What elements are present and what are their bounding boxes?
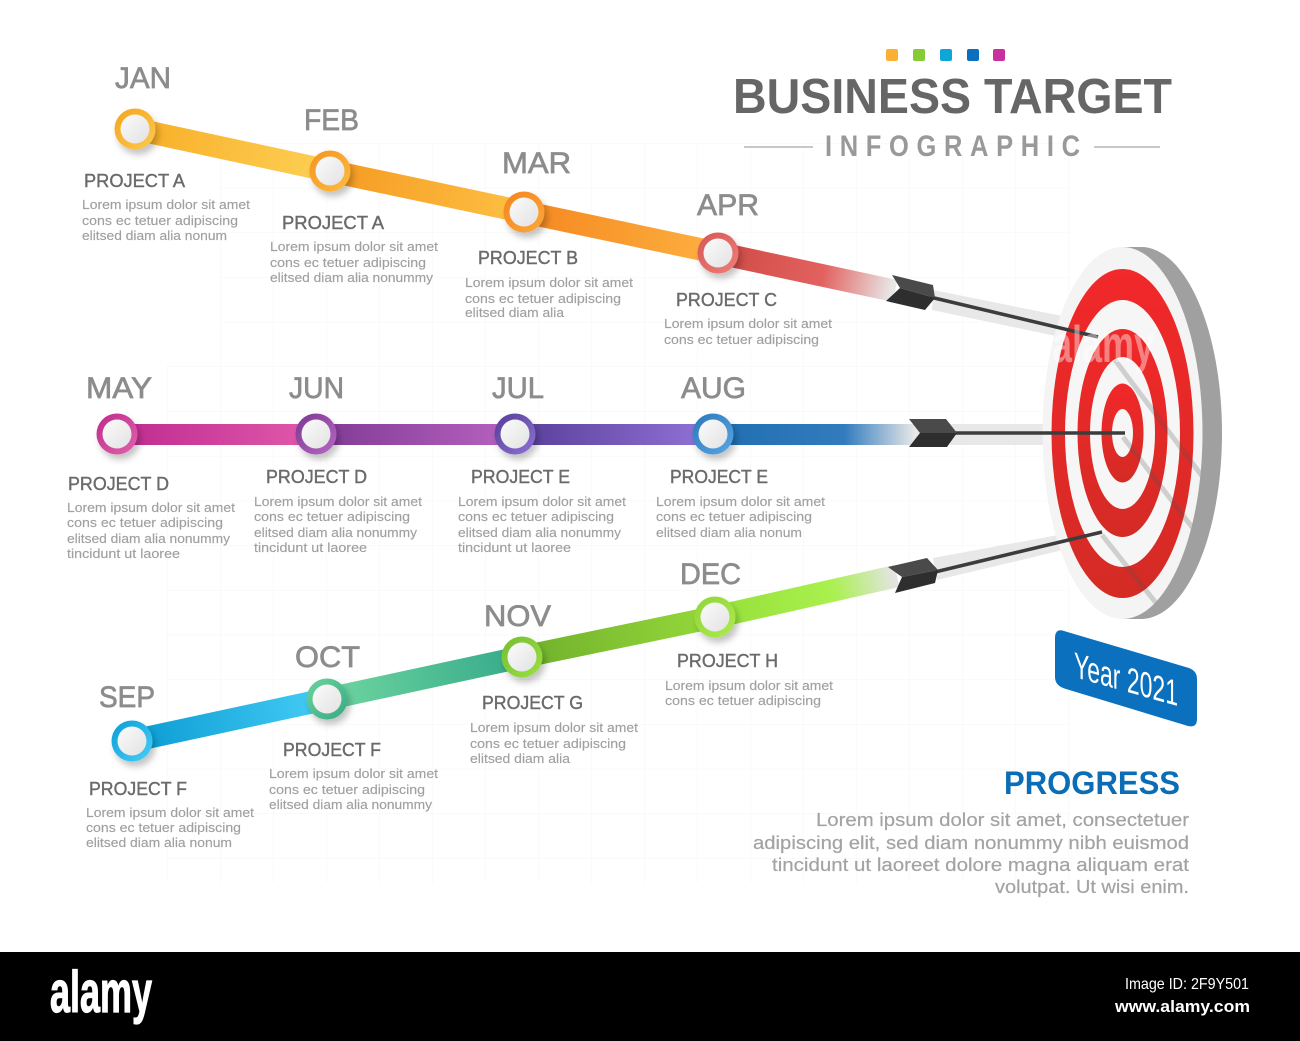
block: March: MAR — [502, 147, 571, 180]
block: August — [656, 372, 825, 540]
block: May: Lorem ipsum dolor sit amet — [67, 500, 235, 515]
block: June: Lorem ipsum dolor sit amet — [254, 494, 422, 509]
block: October: PROJECT F — [283, 740, 381, 760]
block: January: JAN — [115, 62, 171, 95]
block: March: elitsed diam alia — [465, 305, 565, 320]
block: May: tincidunt ut laoree — [67, 546, 180, 561]
block: August: elitsed diam alia nonum — [656, 525, 802, 540]
progress text: adipiscing elit, sed diam nonummy nibh euismod — [753, 833, 1189, 853]
block: May: cons ec tetuer adipiscing — [67, 515, 223, 530]
block: September: Lorem ipsum dolor sit amet — [86, 805, 254, 820]
node: Nov — [502, 636, 542, 678]
block: March: Lorem ipsum dolor sit amet — [465, 275, 633, 290]
node: May — [96, 414, 138, 454]
block: September: cons ec tetuer adipiscing — [86, 820, 241, 835]
arrow: top — [886, 275, 1098, 337]
arrow shadow bands behind the board — [932, 290, 1063, 580]
block: December: cons ec tetuer adipiscing — [665, 693, 821, 708]
node: Jun — [296, 414, 336, 454]
arrow: bottom — [888, 532, 1102, 593]
block: June: cons ec tetuer adipiscing — [254, 509, 410, 524]
block: February: elitsed diam alia nonummy — [270, 270, 434, 285]
block: November — [470, 600, 638, 766]
block: April: Lorem ipsum dolor sit amet — [664, 316, 832, 331]
block: November: Lorem ipsum dolor sit amet — [470, 720, 638, 735]
progress text: volutpat. Ut wisi enim. — [995, 877, 1189, 897]
block: October — [269, 641, 438, 812]
node: Feb — [310, 150, 350, 192]
block: May — [67, 372, 235, 561]
block: June — [254, 372, 422, 555]
block: June: PROJECT D — [266, 467, 367, 487]
block: March: PROJECT B — [478, 248, 578, 268]
block: January: elitsed diam alia nonum — [82, 228, 227, 243]
block: July: cons ec tetuer adipiscing — [458, 509, 614, 524]
footer logo: alamy — [50, 960, 152, 1025]
node: Jan — [114, 108, 156, 150]
block: May: PROJECT D — [68, 474, 169, 494]
block: August: Lorem ipsum dolor sit amet — [656, 494, 825, 509]
block: April: PROJECT C — [676, 290, 777, 310]
node: Mar — [504, 192, 544, 232]
block: May: elitsed diam alia nonummy — [67, 531, 231, 546]
title: BUSINESS TARGET — [733, 70, 1172, 124]
progress heading: PROGRESS — [1004, 765, 1180, 801]
block: February: FEB — [304, 104, 359, 137]
node: Oct — [306, 678, 348, 720]
target board — [932, 247, 1222, 619]
image id: Image ID: 2F9Y501 — [1125, 976, 1249, 993]
block: October: cons ec tetuer adipiscing — [269, 782, 425, 797]
block: February: Lorem ipsum dolor sit amet — [270, 239, 438, 254]
block: April: APR — [697, 189, 759, 222]
progress text — [753, 810, 1189, 897]
timeline: Sep to Dec — [132, 576, 897, 741]
subtitle: INFOGRAPHIC — [825, 129, 1080, 162]
block: November: PROJECT G — [482, 693, 583, 713]
node: Aug — [692, 414, 734, 454]
block: July: JUL — [492, 372, 544, 405]
block: July: tincidunt ut laoree — [458, 540, 571, 555]
year tag: Year 2021 — [1074, 645, 1178, 714]
color squares — [886, 49, 1005, 61]
block: September — [86, 681, 254, 850]
block: February: PROJECT A — [282, 213, 384, 233]
progress text: tincidunt ut laoreet dolore magna aliquam erat — [772, 855, 1189, 875]
block: October: elitsed diam alia nonummy — [269, 797, 433, 812]
block: November: cons ec tetuer adipiscing — [470, 736, 626, 751]
year tag — [1055, 630, 1197, 726]
watermark on target: alamy — [1052, 316, 1154, 374]
block: June: JUN — [289, 372, 344, 405]
block: December: PROJECT H — [677, 651, 778, 671]
block: January — [82, 62, 250, 243]
block: November: elitsed diam alia — [470, 751, 571, 766]
timeline: Jan to Apr — [135, 129, 895, 291]
block: June: tincidunt ut laoree — [254, 540, 367, 555]
block: June: elitsed diam alia nonummy — [254, 525, 418, 540]
block: July: PROJECT E — [471, 467, 570, 487]
block: September: PROJECT F — [89, 779, 187, 799]
website: www.alamy.com — [1114, 997, 1250, 1016]
block: March — [465, 147, 633, 320]
block: August: cons ec tetuer adipiscing — [656, 509, 812, 524]
block: July — [458, 372, 626, 555]
block: December: DEC — [680, 558, 741, 591]
node: Sep — [112, 720, 152, 762]
block: October: OCT — [295, 641, 360, 674]
footer bar — [0, 952, 1300, 1041]
block: February: cons ec tetuer adipiscing — [270, 255, 426, 270]
block: October: Lorem ipsum dolor sit amet — [269, 766, 438, 781]
node: Apr — [698, 232, 738, 274]
block: November: NOV — [484, 600, 551, 633]
progress text: Lorem ipsum dolor sit amet, consectetuer — [816, 810, 1189, 830]
node: Dec — [694, 596, 736, 638]
arrow: middle — [909, 419, 1125, 447]
block: January: PROJECT A — [84, 171, 185, 191]
block: August: PROJECT E — [670, 467, 768, 487]
block: January: cons ec tetuer adipiscing — [82, 213, 238, 228]
block: March: cons ec tetuer adipiscing — [465, 291, 621, 306]
block: January: Lorem ipsum dolor sit amet — [82, 197, 250, 212]
block: May: MAY — [86, 372, 152, 405]
node: Jul — [494, 414, 536, 454]
block: August: AUG — [681, 372, 746, 405]
block: September: elitsed diam alia nonum — [86, 835, 232, 850]
block: April — [664, 189, 832, 347]
block: July: Lorem ipsum dolor sit amet — [458, 494, 626, 509]
block: December — [665, 558, 833, 708]
block: February — [270, 104, 438, 285]
block: April: cons ec tetuer adipiscing — [664, 332, 819, 347]
block: December: Lorem ipsum dolor sit amet — [665, 678, 833, 693]
block: July: elitsed diam alia nonummy — [458, 525, 622, 540]
timeline: May to Aug — [117, 424, 920, 445]
block: September: SEP — [99, 681, 155, 714]
